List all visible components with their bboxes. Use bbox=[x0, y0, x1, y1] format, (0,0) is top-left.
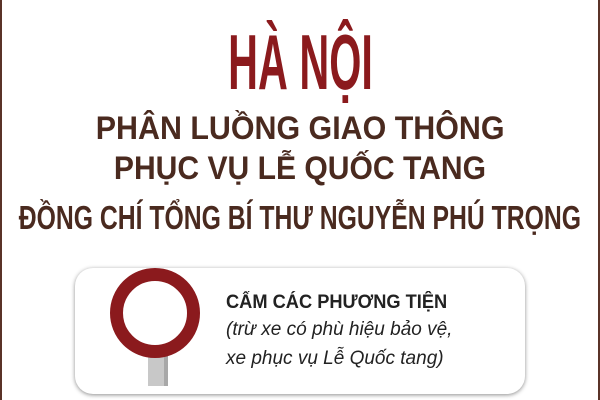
subtitle line 2: PHỤC VỤ LỄ QUỐC TANG bbox=[114, 150, 486, 186]
subtitle line 3: ĐỒNG CHÍ TỔNG BÍ THƯ NGUYỄN PHÚ TRỌNG bbox=[19, 199, 581, 236]
text: notice: xe phục vụ Lễ Quốc tang) bbox=[226, 348, 444, 369]
subtitle line 1: PHÂN LUỒNG GIAO THÔNG bbox=[96, 110, 504, 146]
text: notice bbox=[225, 291, 452, 369]
title: Ha Noi: HÀ NỘI bbox=[228, 18, 372, 106]
panel: prohibition notice bbox=[75, 268, 525, 394]
icon: no-vehicles sign bbox=[110, 268, 200, 386]
text: notice: (trừ xe có phù hiệu bảo vệ, bbox=[226, 319, 452, 340]
left border bbox=[0, 0, 2, 400]
text: notice: CẤM CÁC PHƯƠNG TIỆN bbox=[226, 292, 447, 313]
right border bbox=[598, 0, 600, 400]
